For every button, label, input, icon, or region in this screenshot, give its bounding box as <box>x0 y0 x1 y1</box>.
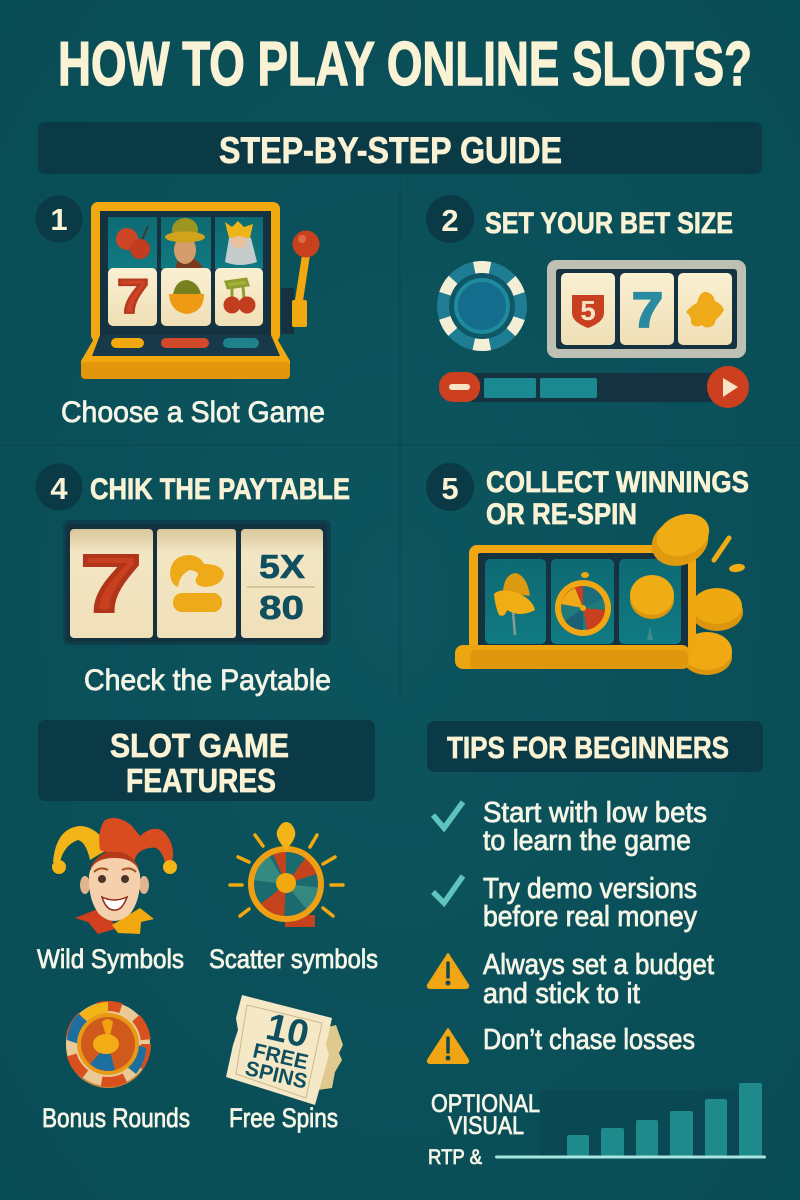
chart label: RTP & <box>428 1146 482 1169</box>
icon: slot machine: 7 <box>117 271 149 324</box>
number badge 2 <box>426 195 474 243</box>
icon: free spins ticket: FREE <box>251 1039 310 1074</box>
number badge 2: 2 <box>441 203 459 238</box>
icon: three reel display: 5 <box>580 295 596 326</box>
tip text: Try demo versions <box>483 873 697 905</box>
heading: chik the paytable: CHIK THE PAYTABLE <box>90 473 350 506</box>
icon: warning triangle <box>428 954 468 988</box>
icon: free spins ticket: 10 <box>262 1006 313 1056</box>
banner: step-by-step guide: STEP-BY-STEP GUIDE <box>219 130 562 171</box>
icon: jester <box>52 818 177 934</box>
tip text <box>483 797 707 857</box>
number badge 1 <box>36 196 82 242</box>
banner: slot game features: FEATURES <box>126 762 276 799</box>
label: bonus rounds: Bonus Rounds <box>42 1103 190 1133</box>
icon: winnings slot machine <box>455 545 696 669</box>
feature: wild symbols <box>37 818 184 974</box>
feature: scatter symbols <box>209 822 378 974</box>
tip: don't chase losses <box>428 1024 695 1063</box>
tip text: Start with low bets <box>483 797 707 829</box>
icon: flying coin <box>644 506 716 574</box>
number badge 5 <box>426 463 474 511</box>
icon: slot machine <box>81 202 294 379</box>
icon: poker chip <box>437 261 527 351</box>
icon: paytable reels: 7 <box>81 539 141 628</box>
icon: bonus chip <box>66 1002 150 1088</box>
icon: three reel display: 7 <box>632 284 663 338</box>
icon: free spins ticket: SPINS <box>243 1057 310 1094</box>
feature: free spins <box>226 995 343 1133</box>
panel: step 5 collect winnings <box>426 463 749 675</box>
tip text: and stick to it <box>483 978 640 1010</box>
chart label: VISUAL <box>448 1112 524 1140</box>
label: wild symbols: Wild Symbols <box>37 944 184 974</box>
icon: sparks <box>714 538 745 573</box>
heading: collect winnings or re-spin: OR RE-SPIN <box>486 498 637 531</box>
tip text: before real money <box>483 901 697 933</box>
tip: always set a budget <box>428 949 714 1010</box>
number badge 5: 5 <box>441 471 459 506</box>
icon: paytable reels <box>63 520 331 645</box>
icon: stacked coins <box>682 588 743 675</box>
tip: try demo versions <box>433 873 697 933</box>
number badge 4 <box>36 464 82 510</box>
banner: slot game features <box>38 720 375 801</box>
icon: free spins ticket <box>226 995 343 1105</box>
banner: tips for beginners <box>427 721 763 772</box>
tip text <box>483 949 714 1010</box>
number badge 1: 1 <box>50 202 68 237</box>
icon: prize wheel <box>230 822 343 927</box>
icon: check mark <box>433 876 463 903</box>
icon: paytable reels: 80 <box>259 589 304 626</box>
label: choose a slot game: Choose a Slot Game <box>61 396 325 429</box>
heading: collect winnings or re-spin <box>486 466 749 531</box>
icon: three reel display <box>547 260 746 358</box>
tip text: Always set a budget <box>483 949 714 981</box>
panel: optional visual rtp chart <box>428 1083 766 1169</box>
banner: slot game features: SLOT GAME <box>110 727 289 764</box>
tip text: to learn the game <box>483 825 691 857</box>
banner: tips for beginners: TIPS FOR BEGINNERS <box>447 730 729 765</box>
banner: step-by-step guide <box>38 122 762 174</box>
panel: step 2 set your bet size <box>426 195 749 408</box>
panel: step 4 check the paytable <box>36 464 350 697</box>
icon: warning triangle <box>428 1029 468 1063</box>
tip text <box>483 873 697 933</box>
heading: set your bet size: SET YOUR BET SIZE <box>485 207 733 240</box>
number badge 4: 4 <box>50 471 68 506</box>
icon: paytable reels: 5X <box>259 548 305 585</box>
icon: check mark <box>433 802 463 828</box>
heading: collect winnings or re-spin: COLLECT WINNINGS <box>486 466 749 499</box>
tip: start with low bets <box>433 797 707 857</box>
tip text: Don’t chase losses <box>483 1024 695 1056</box>
feature: bonus rounds <box>42 1002 190 1133</box>
panel: step 1 choose a slot game <box>36 196 325 429</box>
label: check the paytable: Check the Paytable <box>84 664 331 697</box>
label: scatter symbols: Scatter symbols <box>209 944 378 974</box>
bar chart <box>495 1083 766 1158</box>
icon: bet slider <box>439 366 749 408</box>
icon: slot lever <box>292 230 320 327</box>
chart label <box>428 1090 540 1169</box>
label: free spins: Free Spins <box>229 1103 338 1133</box>
chart label: OPTIONAL <box>431 1090 540 1118</box>
